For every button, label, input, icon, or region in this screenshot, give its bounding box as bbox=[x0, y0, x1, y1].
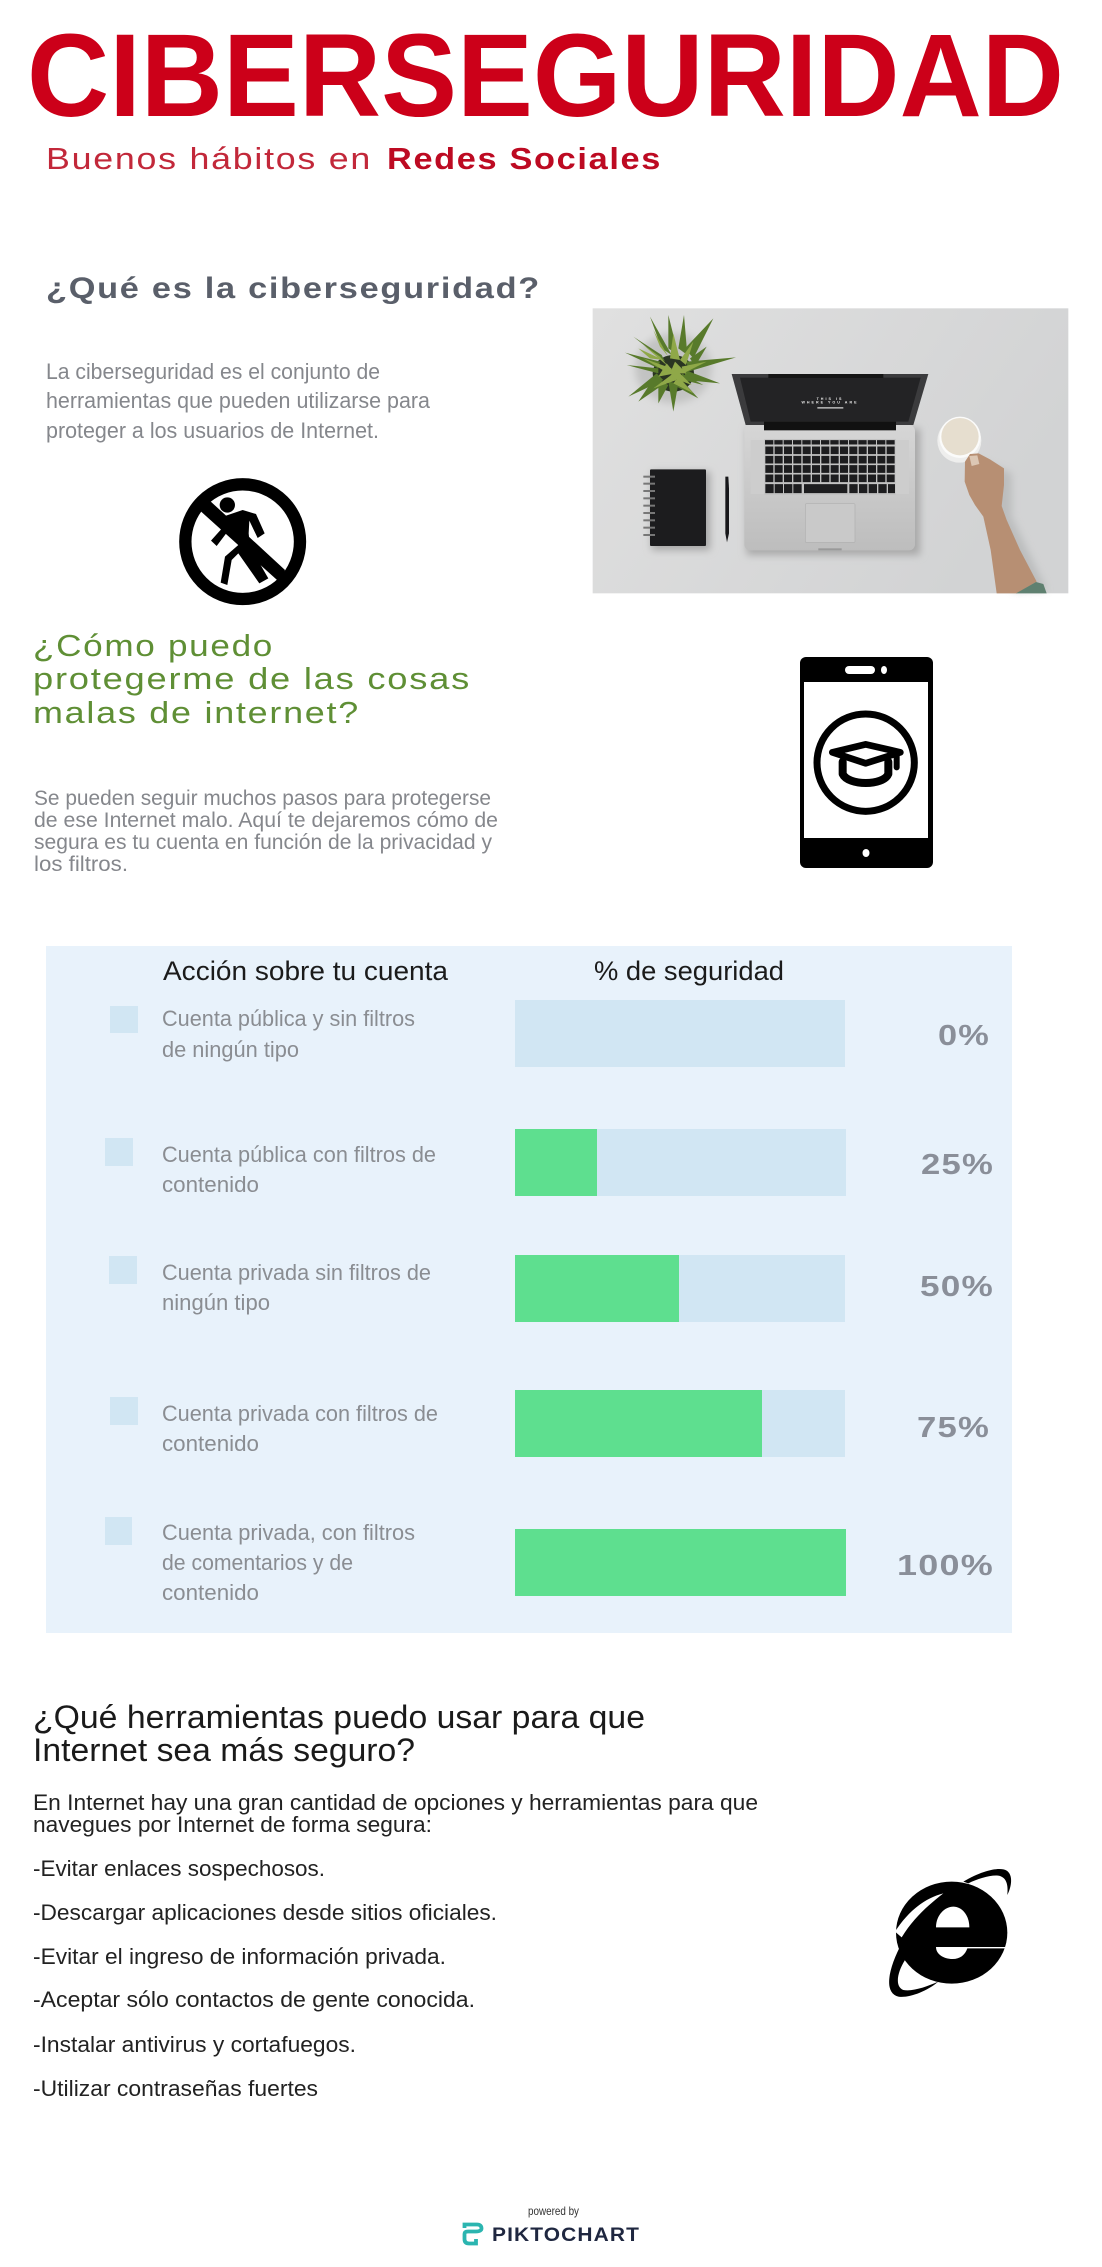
list: safe habits: -Utilizar contraseñas fuertes bbox=[33, 2076, 318, 2101]
text block: tools intro: navegues por Internet de forma segura: bbox=[33, 1812, 432, 1837]
table header bbox=[163, 956, 784, 986]
laptop bbox=[732, 374, 928, 555]
row: 0%: de ningún tipo bbox=[162, 1037, 299, 1062]
row: 50%: Cuenta privada sin filtros de bbox=[162, 1260, 431, 1285]
row: 50% bbox=[109, 1255, 994, 1322]
text block: tools intro: En Internet hay una gran cantidad de opciones y herramientas para que bbox=[33, 1790, 758, 1815]
list: safe habits: -Descargar aplicaciones desde sitios oficiales. bbox=[33, 1900, 497, 1925]
list: safe habits: -Evitar enlaces sospechosos. bbox=[33, 1856, 325, 1881]
title: CIBERSEGURIDAD bbox=[27, 10, 1064, 142]
text block: definition: La ciberseguridad es el conjunto de bbox=[46, 359, 380, 384]
heading: how to protect bbox=[33, 628, 471, 730]
row: 25% bbox=[105, 1129, 994, 1197]
text block: definition: herramientas que pueden utilizarse para bbox=[46, 388, 431, 413]
list: safe habits bbox=[33, 1856, 497, 2101]
row: 25%: Cuenta pública con filtros de bbox=[162, 1142, 436, 1167]
notebook bbox=[643, 469, 710, 550]
heading: tools: ¿Qué herramientas puedo usar para que bbox=[33, 1699, 645, 1735]
subtitle: Buenos hábitos en bbox=[46, 141, 372, 176]
row: 100%: Cuenta privada, con filtros bbox=[162, 1520, 415, 1545]
list: safe habits: -Instalar antivirus y cortafuegos. bbox=[33, 2032, 356, 2057]
table header: Acción sobre tu cuenta bbox=[163, 956, 449, 986]
list: safe habits: -Evitar el ingreso de información privada. bbox=[33, 1944, 446, 1969]
heading: how to protect: ¿Cómo puedo bbox=[33, 628, 274, 663]
text block: protection steps bbox=[34, 787, 498, 876]
row: 100%: contenido bbox=[162, 1580, 259, 1605]
icon: phone with graduation cap bbox=[800, 657, 933, 868]
row: 25%: 25% bbox=[921, 1149, 994, 1181]
table header: % de seguridad bbox=[594, 956, 784, 986]
row: 50%: 50% bbox=[920, 1271, 994, 1303]
row: 50%: ningún tipo bbox=[162, 1290, 270, 1315]
icon: internet explorer logo bbox=[889, 1869, 1011, 1997]
text block: protection steps: los filtros. bbox=[34, 853, 128, 876]
pen bbox=[725, 477, 729, 542]
row: 100% bbox=[105, 1517, 994, 1605]
laptop: THIS IS bbox=[817, 397, 843, 401]
row: 0%: 0% bbox=[938, 1020, 990, 1052]
row: 100%: 100% bbox=[897, 1550, 994, 1582]
footer: powered by piktochart: PIKTOCHART bbox=[492, 2225, 640, 2246]
heading: how to protect: protegerme de las cosas bbox=[33, 661, 471, 696]
row: 0% bbox=[110, 1000, 990, 1067]
heading: what is cybersecurity: ¿Qué es la ciberseguridad? bbox=[46, 272, 541, 305]
row: 75%: contenido bbox=[162, 1431, 259, 1456]
row: 75%: Cuenta privada con filtros de bbox=[162, 1401, 438, 1426]
heading: tools: Internet sea más seguro? bbox=[33, 1732, 415, 1768]
text block: protection steps: Se pueden seguir muchos pasos para protegerse bbox=[34, 787, 491, 810]
text block: tools intro bbox=[33, 1790, 758, 1837]
list: safe habits: -Aceptar sólo contactos de gente conocida. bbox=[33, 1987, 475, 2012]
photo: laptop on desk bbox=[593, 308, 1068, 593]
row: 75% bbox=[110, 1390, 990, 1457]
row: 0%: Cuenta pública y sin filtros bbox=[162, 1006, 415, 1031]
icon: no pedestrian sign bbox=[185, 484, 300, 599]
row: 25%: contenido bbox=[162, 1172, 259, 1197]
row: 75%: 75% bbox=[917, 1412, 990, 1444]
text block: definition: proteger a los usuarios de Internet. bbox=[46, 418, 379, 443]
subtitle: Redes Sociales bbox=[387, 141, 662, 176]
row: 100%: de comentarios y de bbox=[162, 1550, 353, 1575]
footer: powered by piktochart bbox=[464, 2204, 640, 2246]
heading: how to protect: malas de internet? bbox=[33, 695, 360, 730]
panel: account security table bbox=[46, 946, 1012, 1633]
text block: protection steps: de ese Internet malo. Aquí te dejaremos cómo de bbox=[34, 809, 498, 832]
heading: tools bbox=[33, 1699, 645, 1768]
footer: powered by piktochart: powered by bbox=[528, 2204, 579, 2218]
plant bbox=[625, 315, 736, 412]
text block: protection steps: segura es tu cuenta en función de la privacidad y bbox=[34, 831, 492, 854]
icon: piktochart logo bbox=[464, 2224, 482, 2244]
laptop: WHERE YOU ARE bbox=[801, 400, 859, 404]
hand and coffee cup bbox=[937, 417, 1047, 593]
text block: definition bbox=[46, 359, 431, 443]
subtitle bbox=[46, 141, 662, 176]
